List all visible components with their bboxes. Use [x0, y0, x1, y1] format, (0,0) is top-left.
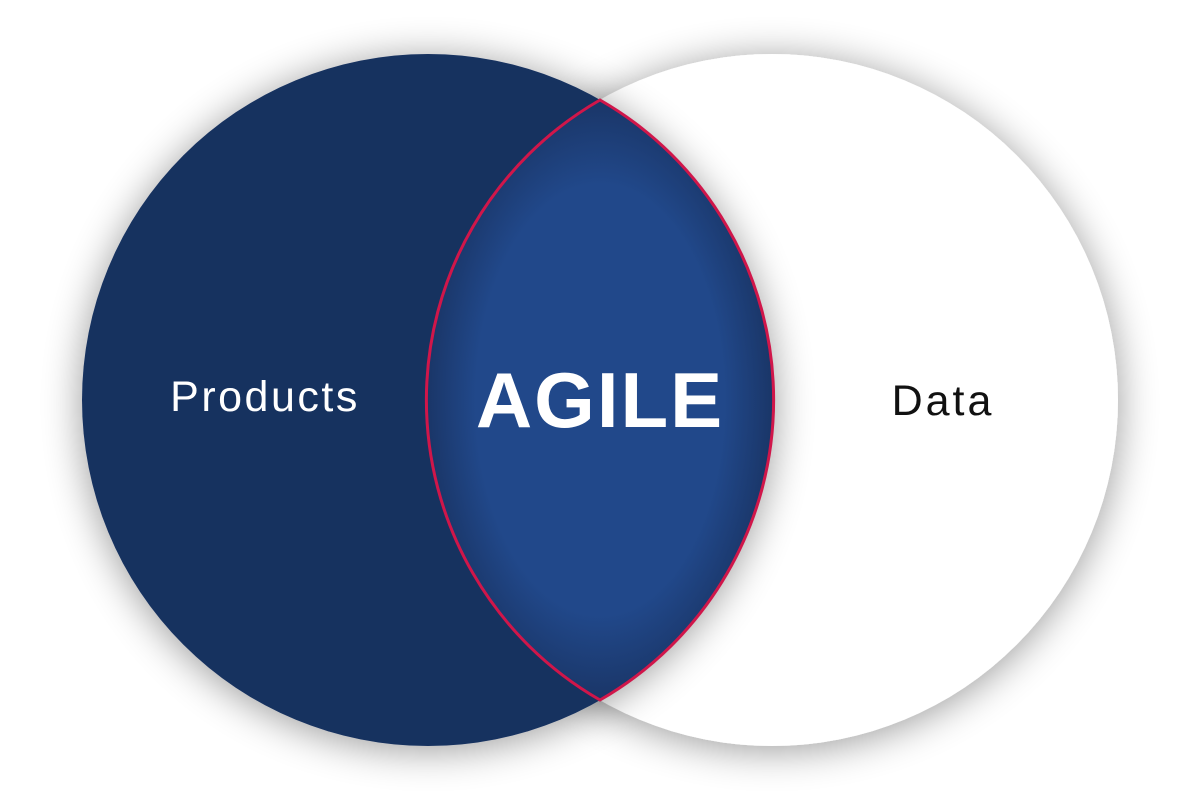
lens: agile — [424, 98, 776, 702]
diagram: venn — [82, 54, 1118, 746]
label: products: Products — [170, 373, 360, 421]
circle: data — [426, 54, 1118, 746]
circle: products — [82, 54, 774, 746]
label: data: Data — [892, 377, 994, 425]
label: agile: AGILE — [476, 356, 724, 444]
